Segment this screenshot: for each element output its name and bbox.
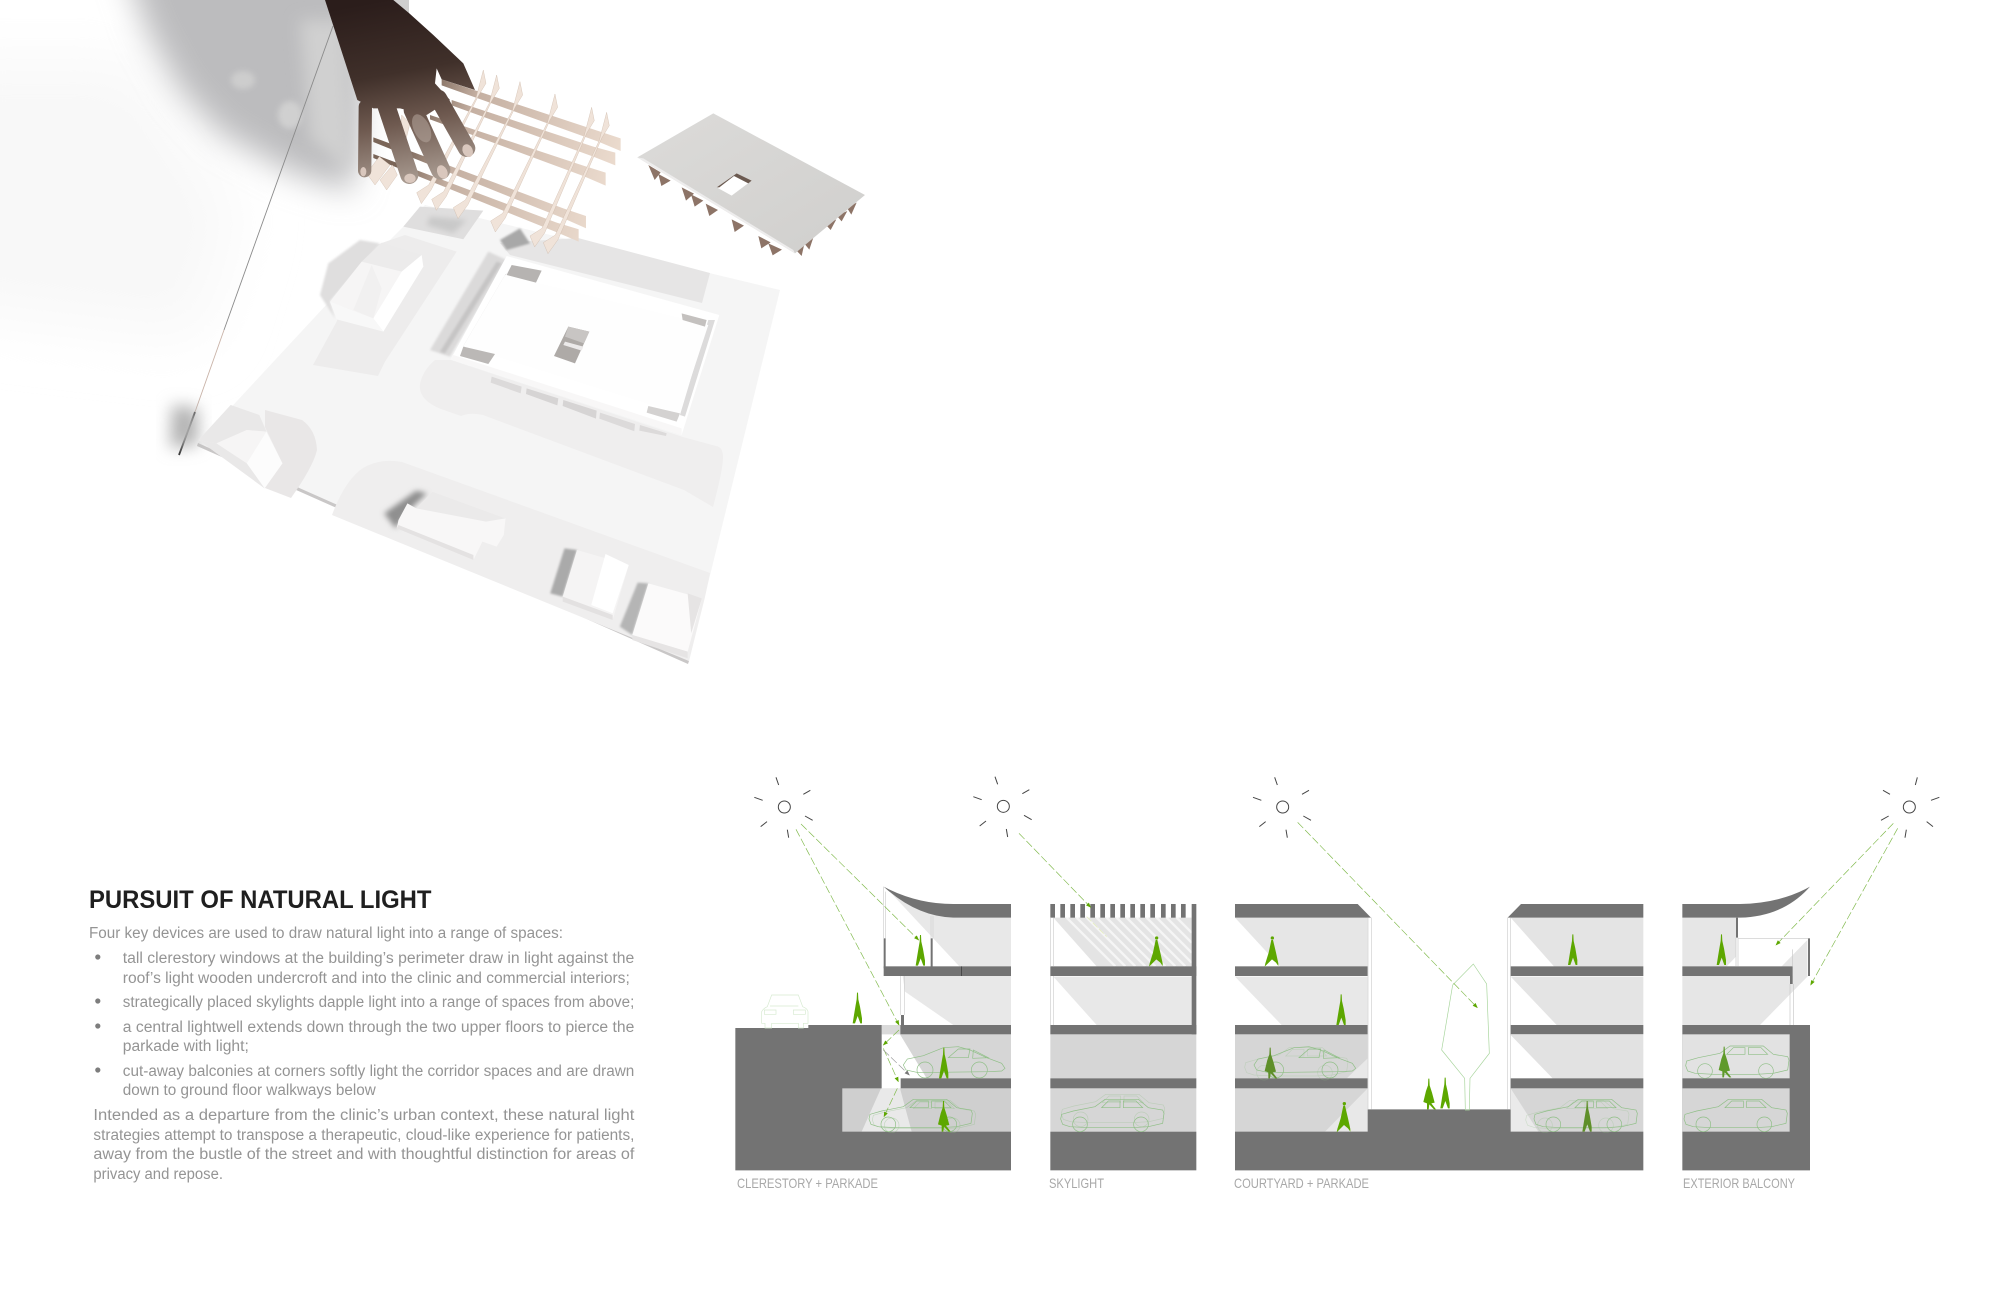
label: EXTERIOR BALCONY: [1683, 1175, 1796, 1191]
car: lower parkade: [869, 1099, 976, 1133]
text block: description: strategically placed skylights dapple light into a range of spaces from above;: [123, 994, 634, 1011]
text block: description: a central lightwell extends down through the two upper floors to pierce the: [123, 1019, 634, 1036]
photo: physical site model with hand placing the roof lattice: [0, 0, 865, 664]
icon: sun: [1881, 777, 1939, 838]
parcel: upper right lot: [500, 238, 710, 303]
upper floor daylight: [887, 888, 1011, 966]
neighbouring houses: [170, 405, 702, 658]
parcel: around building: [420, 360, 723, 507]
parcel: left house: [265, 410, 317, 498]
people: [1265, 934, 1577, 1132]
people: [1717, 934, 1726, 965]
structure: [1682, 887, 1810, 1170]
hatched light: [1053, 918, 1192, 966]
text block: description: away from the bustle of the street and with thoughtful distinction for areas of: [93, 1146, 635, 1163]
roof plate model: [637, 113, 865, 256]
hand shadow on table: [0, 0, 409, 340]
panel: exterior balcony section: [1682, 777, 1939, 1191]
floors: [1053, 977, 1192, 1025]
text block: description: parkade with light;: [123, 1038, 249, 1055]
table edge line: [179, 26, 333, 455]
structure: [1235, 904, 1643, 1170]
person: [1149, 936, 1163, 967]
building model: [430, 228, 719, 436]
text block: description: strategies attempt to transpose a therapeutic, cloud-like experience for patients,: [93, 1127, 634, 1144]
lattice cross slats: [367, 70, 609, 254]
text block: description: down to ground floor walkways below: [123, 1082, 377, 1099]
people: [853, 935, 951, 1132]
window lines: [1051, 918, 1053, 1025]
panel: skylight section: [973, 777, 1196, 1191]
cars: [1684, 1046, 1789, 1132]
hand: [325, 0, 475, 183]
icon: sun: [973, 777, 1032, 837]
lattice long slats: [373, 79, 621, 242]
roof: [884, 887, 1011, 918]
label: CLERESTORY + PARKADE: [737, 1175, 878, 1191]
text block: description: roof’s light wooden undercroft and into the clinic and commercial interiors;: [123, 970, 630, 987]
text block: description: Intended as a departure from the clinic’s urban context, these natural light: [93, 1107, 635, 1124]
icon: sun: [754, 777, 813, 838]
small block near lattice: [403, 207, 483, 239]
tree: [1442, 964, 1489, 1110]
light rays: [1776, 823, 1898, 985]
label: SKYLIGHT: [1049, 1175, 1104, 1191]
site model base board: [197, 205, 780, 664]
parcel: lower block: [332, 461, 710, 661]
slabs and wall: [1050, 904, 1196, 1170]
label: COURTYARD + PARKADE: [1234, 1175, 1369, 1191]
car: [1061, 1094, 1165, 1132]
light ray: [1298, 822, 1477, 1008]
middle floor: [903, 976, 1011, 1025]
light ray: [1019, 833, 1091, 907]
parkade openings: [1682, 1034, 1790, 1078]
car: street: [762, 995, 808, 1028]
panel: courtyard + parkade section: [1234, 777, 1643, 1191]
text block: description: [89, 925, 635, 1183]
parkade levels: [882, 1034, 1011, 1078]
colonnade shadows: [491, 377, 522, 393]
skylight slats: [1050, 904, 1186, 918]
roof corner cut-outs: [507, 265, 542, 283]
floors: [1682, 918, 1808, 1025]
panel: clerestory + parkade section: [735, 777, 1011, 1191]
right block floors: [1511, 918, 1643, 1132]
text block: description: Four key devices are used to draw natural light into a range of spaces:: [89, 925, 563, 942]
heading: pursuit of natural light: PURSUIT OF NATURAL LIGHT: [89, 886, 432, 914]
text block: description: cut-away balconies at corners softly light the corridor spaces and are drawn: [123, 1063, 634, 1080]
cars: [1245, 1047, 1637, 1133]
balcony lines: [1736, 938, 1808, 1025]
slabs: [884, 938, 1011, 1088]
upper left house: [313, 235, 457, 376]
text block: description: tall clerestory windows at the building’s perimeter draw in light against the: [123, 950, 634, 967]
ground mass: [735, 1025, 1011, 1170]
icon: sun: [1253, 777, 1311, 838]
window mullions: [884, 887, 933, 1015]
text block: description: privacy and repose.: [93, 1166, 223, 1183]
light rays: [796, 824, 919, 1117]
car: upper parkade: [903, 1047, 1005, 1078]
left block floors: [1235, 918, 1368, 1132]
roof skylight: [554, 327, 589, 363]
roof lattice model: [325, 0, 621, 254]
truss spikes: [648, 165, 857, 256]
